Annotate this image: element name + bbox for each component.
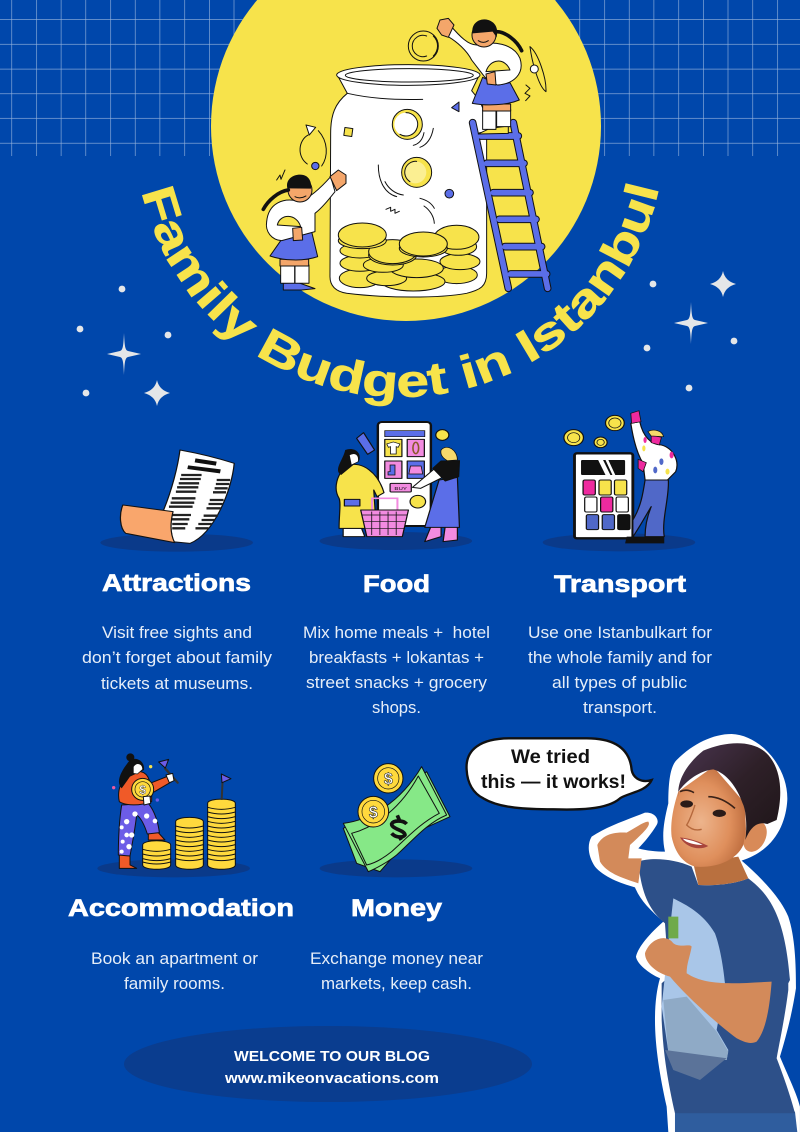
blue dot: [445, 189, 454, 198]
description: markets, keep cash.: [321, 974, 472, 993]
jar: [330, 65, 487, 297]
neck: [693, 857, 748, 885]
ladder: [473, 123, 548, 288]
description: breakfasts + lokantas +: [309, 648, 484, 667]
t-shirt: [638, 859, 795, 1113]
icon: coin stacks and girl: [97, 753, 250, 877]
blog banner: www.mikeonvacations.com: [224, 1070, 439, 1087]
icon: banknotes and coins: $: [384, 771, 393, 788]
icon: calculator person: [543, 411, 695, 551]
description: Exchange money near: [310, 949, 483, 968]
speech bubble: We tried: [511, 747, 590, 768]
icon: coin stacks and girl: $: [139, 783, 146, 797]
description: Mix home meals + hotel: [303, 623, 490, 642]
heading: Money: [351, 895, 443, 922]
square confetti: [344, 127, 353, 137]
description: tickets at museums.: [101, 674, 253, 693]
panel: attractions: [82, 450, 277, 693]
eyes and mouth: [680, 790, 735, 848]
panel: money: [310, 764, 488, 993]
description: transport.: [583, 698, 657, 717]
heading: Transport: [554, 571, 686, 598]
girl on ladder: [437, 18, 546, 134]
icon: online shopping: [319, 422, 472, 550]
icon: receipt: [100, 450, 253, 552]
heading: Attractions: [102, 570, 251, 597]
panel: accommodation: [68, 753, 294, 993]
illustration: coin jar and girls: [263, 18, 548, 297]
boy photo cut-out: [589, 734, 800, 1132]
yellow sun circle: [211, 0, 601, 321]
jeans: [675, 1112, 797, 1132]
title on arc: Family Budget in Istanbul: [142, 183, 658, 406]
blog banner: [124, 1026, 532, 1102]
sparkle stars and dots: [77, 271, 737, 406]
speech bubble: this — it works!: [481, 772, 626, 793]
blue triangle: [452, 102, 459, 112]
girl on ground: [263, 125, 346, 290]
icon: banknotes and coins: $: [369, 804, 378, 821]
description: Visit free sights and: [102, 623, 252, 642]
heading: Food: [363, 571, 430, 598]
face: [671, 767, 746, 867]
ear: [739, 818, 771, 856]
shirt print: [662, 898, 728, 1060]
description: the whole family and for: [528, 648, 712, 667]
description: all types of public: [552, 673, 688, 692]
thumbs-up arm: [597, 822, 649, 883]
speech bubble: [467, 738, 652, 810]
description: street snacks + grocery: [306, 673, 488, 692]
description: don’t forget about family: [82, 648, 273, 667]
icon: banknotes and coins: [320, 764, 472, 877]
description: Use one Istanbulkart for: [528, 623, 712, 642]
heading: Accommodation: [68, 895, 294, 922]
falling coins: [392, 31, 438, 187]
description: shops.: [372, 698, 421, 717]
coin pile: [338, 223, 480, 291]
description: Book an apartment or: [91, 949, 258, 968]
hair: [678, 743, 780, 840]
panel: transport: [528, 411, 717, 717]
panel: food: [303, 422, 495, 717]
buy label: BUY: [394, 486, 407, 492]
pointing arm: [645, 938, 772, 1043]
blog banner: WELCOME TO OUR BLOG: [234, 1048, 430, 1065]
description: family rooms.: [124, 974, 225, 993]
